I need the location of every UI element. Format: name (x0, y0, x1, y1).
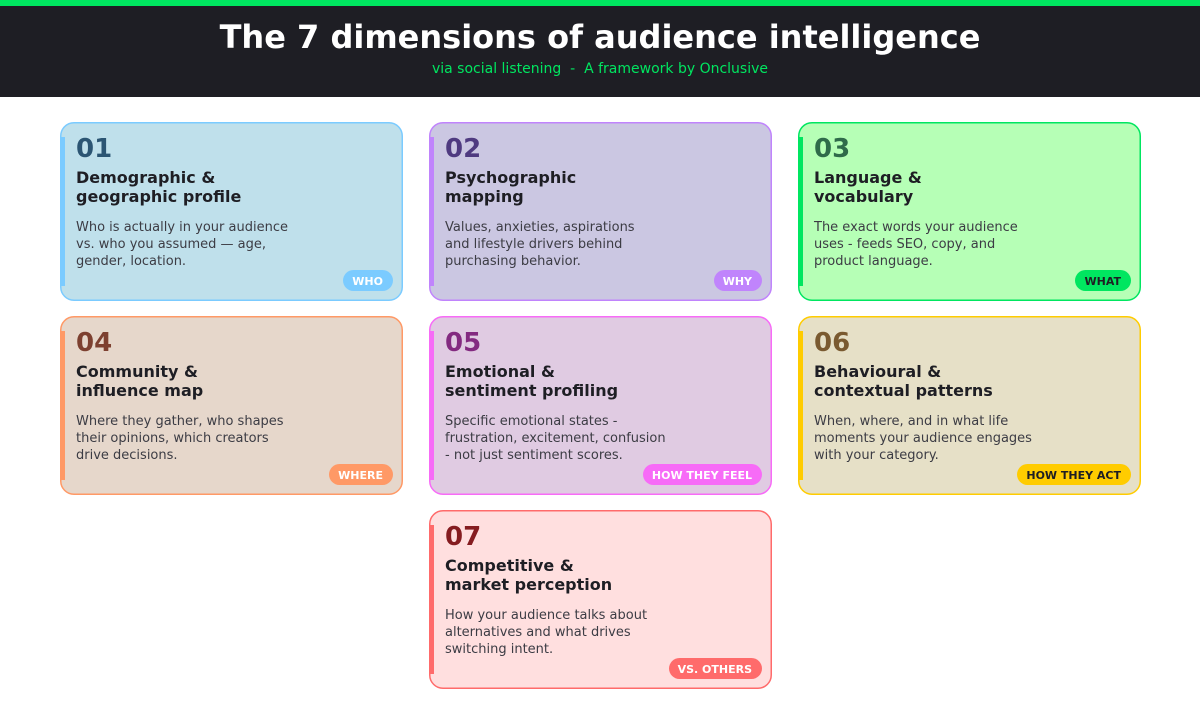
panel: 02 psychographic (429, 122, 772, 301)
description 01: gender, location. (76, 254, 186, 269)
description 01: Who is actually in your audience (76, 220, 288, 235)
description 04: their opinions, which creators (76, 431, 269, 446)
description 06 (814, 414, 1032, 463)
description 03: The exact words your audience (814, 220, 1018, 235)
number 07: 07 (445, 522, 481, 552)
heading 02 (445, 168, 576, 206)
panel: 01 demographic (60, 122, 403, 301)
heading 07: market perception (445, 575, 612, 594)
description 03: uses - feeds SEO, copy, and (814, 237, 995, 252)
description 03: product language. (814, 254, 933, 269)
badge VS. OTHERS (669, 658, 762, 679)
heading 06: Behavioural & (814, 362, 941, 381)
heading 07: Competitive & (445, 556, 574, 575)
heading 04: Community & (76, 362, 198, 381)
number 06: 06 (814, 328, 850, 358)
heading 03: Language & (814, 168, 922, 187)
heading 04 (76, 362, 203, 400)
badge HOW THEY FEEL (643, 464, 762, 485)
description 02: and lifestyle drivers behind (445, 237, 622, 252)
badge WHO (343, 270, 393, 291)
badge WHY (714, 270, 762, 291)
top accent stripe (0, 0, 1200, 6)
card shape 06 with accent bar (798, 316, 1141, 495)
title: The 7 dimensions of audience intelligence (220, 18, 980, 56)
number 02: 02 (445, 134, 481, 164)
number 04: 04 (76, 328, 112, 358)
heading 01: geographic profile (76, 187, 241, 206)
badge VS. OTHERS: VS. OTHERS (678, 663, 752, 676)
description 03 (814, 220, 1018, 269)
header band (0, 0, 1200, 97)
heading 03: vocabulary (814, 187, 913, 206)
heading 01: Demographic & (76, 168, 215, 187)
number 03: 03 (814, 134, 850, 164)
card shape 05 with accent bar (429, 316, 772, 495)
card shape 04 with accent bar (60, 316, 403, 495)
panel: 06 behavioural (798, 316, 1141, 495)
badge WHERE (329, 464, 393, 485)
description 07: How your audience talks about (445, 608, 647, 623)
description 05: - not just sentiment scores. (445, 448, 623, 463)
description 07: alternatives and what drives (445, 625, 631, 640)
description 02: Values, anxieties, aspirations (445, 220, 635, 235)
description 04: Where they gather, who shapes (76, 414, 284, 429)
heading 02: Psychographic (445, 168, 576, 187)
badge WHAT: WHAT (1084, 275, 1121, 288)
description 06: with your category. (814, 448, 939, 463)
description 05: Specific emotional states - (445, 414, 618, 429)
description 07 (445, 608, 647, 657)
heading 06 (814, 362, 993, 400)
panel: 07 competitive (429, 510, 772, 689)
description 05: frustration, excitement, confusion (445, 431, 666, 446)
badge HOW THEY ACT: HOW THEY ACT (1026, 469, 1121, 482)
description 02 (445, 220, 635, 269)
heading 05 (445, 362, 618, 400)
badge HOW THEY FEEL: HOW THEY FEEL (652, 469, 752, 482)
description 02: purchasing behavior. (445, 254, 581, 269)
description 05 (445, 414, 666, 463)
panel: 03 language (798, 122, 1141, 301)
heading 07 (445, 556, 612, 594)
description 06: When, where, and in what life (814, 414, 1008, 429)
heading 03 (814, 168, 922, 206)
description 01 (76, 220, 288, 269)
panel: 04 community (60, 316, 403, 495)
badge HOW THEY ACT (1017, 464, 1131, 485)
panel: 05 emotional (429, 316, 772, 495)
heading 05: Emotional & (445, 362, 555, 381)
description 06: moments your audience engages (814, 431, 1032, 446)
heading 05: sentiment profiling (445, 381, 618, 400)
badge WHO: WHO (352, 275, 383, 288)
badge WHY: WHY (723, 275, 752, 288)
subtitle: via social listening - A framework by Onclusive (432, 61, 768, 77)
number 01: 01 (76, 134, 112, 164)
description 01: vs. who you assumed — age, (76, 237, 266, 252)
card shape 07 with accent bar (429, 510, 772, 689)
description 04 (76, 414, 284, 463)
heading 06: contextual patterns (814, 381, 993, 400)
heading 02: mapping (445, 187, 524, 206)
card shape 02 with accent bar (429, 122, 772, 301)
description 07: switching intent. (445, 642, 553, 657)
heading 01 (76, 168, 241, 206)
card shape 01 with accent bar (60, 122, 403, 301)
description 04: drive decisions. (76, 448, 178, 463)
badge WHAT (1075, 270, 1131, 291)
number 05: 05 (445, 328, 481, 358)
card shape 03 with accent bar (798, 122, 1141, 301)
badge WHERE: WHERE (338, 469, 383, 482)
heading 04: influence map (76, 381, 203, 400)
